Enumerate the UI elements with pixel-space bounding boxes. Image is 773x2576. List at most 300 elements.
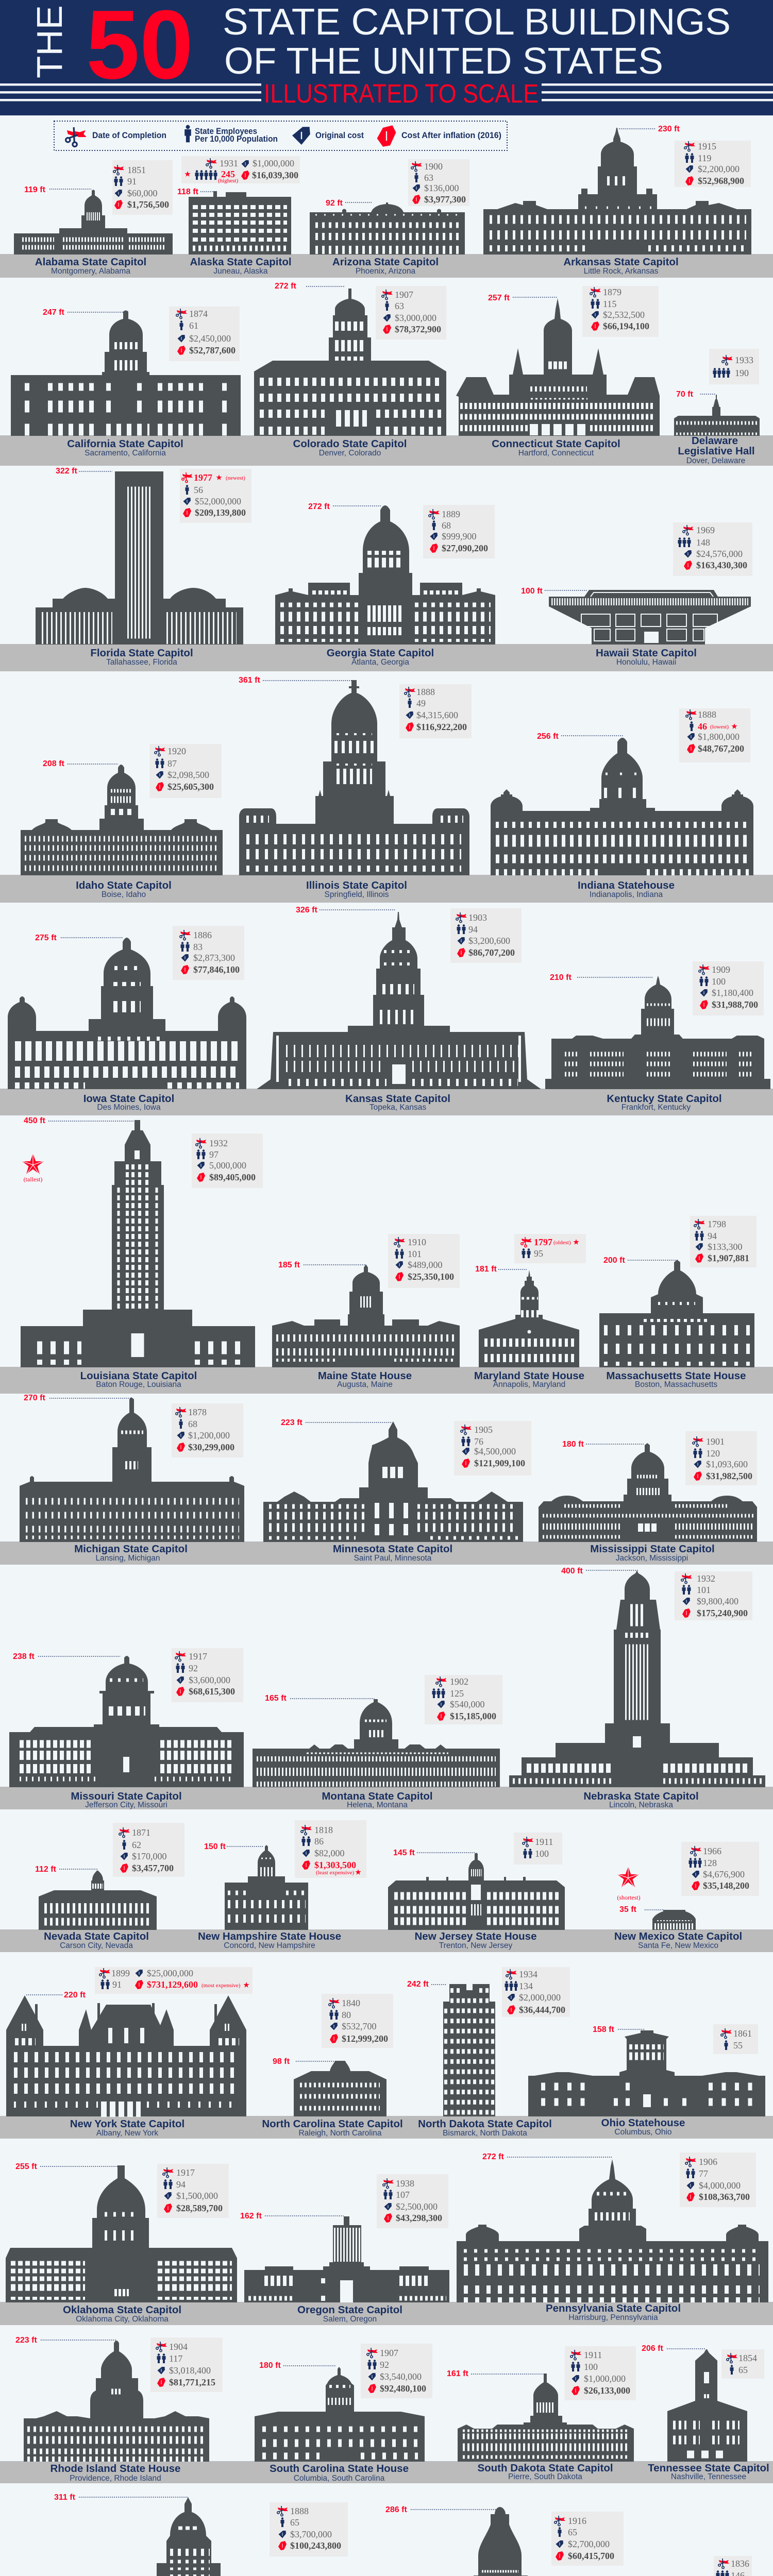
name (71, 1790, 182, 1809)
name: North Carolina State Capitol (262, 2118, 403, 2130)
stats panel: 1966 (703, 1846, 721, 1856)
stats panel: 1907 (380, 2348, 398, 2358)
stats panel: $52,968,900 (698, 176, 744, 186)
name: Salem, Oregon (323, 2315, 377, 2324)
height label: 98 ft (273, 2057, 290, 2066)
name: Delaware (692, 435, 738, 447)
stats panel: 1836 (731, 2558, 749, 2569)
name (418, 2118, 552, 2138)
stats panel: 65 (738, 2365, 748, 2375)
stats panel: $82,000 (314, 1848, 344, 1858)
stats panel: $209,139,800 (195, 507, 246, 518)
name: Boise, Idaho (102, 890, 146, 899)
panel: North Dakota State Capitol (407, 1967, 570, 2138)
name: Jefferson City, Missouri (85, 1801, 167, 1809)
stats panel (675, 141, 751, 187)
name (322, 1790, 433, 1809)
stats panel: (most expensive) (201, 1982, 241, 1989)
panel: Minnesota State Capitol (263, 1418, 531, 1563)
stats panel (112, 160, 173, 215)
height label: 150 ft (204, 1842, 226, 1851)
name (293, 438, 407, 457)
stats panel: 1931 (220, 158, 238, 168)
stats panel: 190 (735, 368, 749, 378)
stats panel: $1,180,400 (712, 988, 753, 998)
panel: Oregon State Capitol (240, 2174, 449, 2324)
name: Montana State Capitol (322, 1790, 433, 1802)
stats panel: 1906 (699, 2157, 717, 2167)
height label: 242 ft (407, 1980, 429, 1989)
building (491, 738, 753, 875)
stats panel: $28,589,700 (176, 2203, 223, 2213)
name: Atlanta, Georgia (351, 658, 409, 667)
stats panel: $52,000,000 (195, 496, 241, 506)
name (297, 2304, 402, 2324)
height label: 272 ft (275, 282, 296, 291)
panel: Nebraska State Capitol (509, 1567, 765, 1809)
name: Florida State Capitol (90, 647, 193, 659)
stats panel: 56 (194, 485, 203, 495)
stats panel: $25,350,100 (408, 1272, 454, 1282)
title line 1: STATE CAPITOL BUILDINGS (223, 2, 731, 43)
height label: 112 ft (35, 1865, 57, 1874)
building (388, 1853, 565, 1930)
building (667, 2349, 747, 2462)
name: Dover, Delaware (686, 456, 745, 465)
height label (593, 2025, 645, 2034)
panel: Missouri State Capitol (9, 1648, 244, 1809)
name (90, 647, 193, 667)
stats panel (565, 2346, 636, 2400)
stats panel (713, 2024, 758, 2054)
name (76, 879, 172, 899)
building (294, 2061, 386, 2116)
stats panel: 61 (189, 320, 198, 331)
name: Alabama State Capitol (35, 256, 146, 268)
name (262, 2118, 403, 2138)
name: Denver, Colorado (319, 449, 381, 457)
name: Massachusetts State House (606, 1370, 746, 1382)
building (456, 298, 660, 436)
name (492, 438, 620, 457)
name: Lincoln, Nebraska (609, 1801, 673, 1809)
name: North Dakota State Capitol (418, 2118, 552, 2130)
stats panel (551, 2512, 624, 2566)
stats panel: $4,500,000 (474, 1446, 516, 1456)
building (599, 1260, 754, 1367)
building (36, 471, 243, 645)
height label (676, 390, 715, 399)
name (563, 256, 679, 276)
name (414, 1930, 537, 1950)
stats panel: 63 (395, 301, 404, 311)
stats panel: 100 (712, 976, 726, 987)
name (44, 1930, 149, 1950)
stats panel: $1,907,881 (708, 1253, 749, 1263)
panel: Idaho State Capitol (21, 744, 223, 899)
building (257, 912, 541, 1089)
stats panel: 1871 (132, 1827, 150, 1838)
name: Ohio Statehouse (601, 2117, 685, 2129)
height label (24, 185, 91, 194)
name (333, 1543, 452, 1563)
stats panel: $60,000 (127, 188, 158, 198)
stats panel (388, 1234, 460, 1288)
stats panel: 62 (132, 1840, 141, 1850)
building (275, 505, 495, 645)
stats panel: 1977 (194, 472, 212, 483)
building (263, 1421, 523, 1542)
height label: 238 ft (13, 1652, 35, 1661)
stats panel (425, 1675, 502, 1724)
name (306, 879, 407, 899)
stats panel: (lowest) (710, 724, 729, 730)
stats panel: 1905 (474, 1425, 493, 1435)
stats panel: 1851 (127, 165, 146, 175)
stats panel: $78,372,900 (395, 324, 441, 334)
name (198, 1930, 341, 1950)
stats panel (675, 1571, 752, 1620)
stats panel: 120 (706, 1448, 720, 1459)
panel: Vermont State House (634, 2556, 753, 2576)
name: Lansing, Michigan (96, 1554, 160, 1563)
height label: 162 ft (240, 2212, 262, 2221)
name (80, 1370, 197, 1389)
panel: Montana State Capitol (253, 1675, 502, 1809)
panel: Utah State Capitol (376, 2505, 625, 2576)
name (590, 1543, 715, 1563)
name: Providence, Rhode Island (70, 2474, 161, 2483)
building (24, 2341, 209, 2462)
stats panel: $121,909,100 (474, 1458, 525, 1468)
name: Maryland State House (474, 1370, 584, 1382)
stats panel (150, 2337, 223, 2392)
legend icon: state employees (184, 125, 191, 142)
stats panel: $3,000,000 (395, 313, 436, 323)
name (35, 256, 146, 276)
stats panel: $1,500,000 (176, 2191, 218, 2201)
height label (326, 199, 372, 208)
height label: 206 ft (642, 2344, 663, 2353)
stats panel: 1888 (290, 2506, 309, 2516)
building (479, 1270, 579, 1367)
legend icon: cost after inflation (377, 125, 396, 147)
height label (642, 2344, 706, 2353)
name (74, 1543, 188, 1563)
building (253, 1699, 500, 1787)
panel: Indiana Statehouse (491, 708, 753, 899)
stats panel: 1902 (450, 1676, 468, 1687)
stats panel: 100 (535, 1849, 549, 1859)
stats panel: $48,767,200 (698, 743, 744, 754)
height label: 210 ft (550, 973, 572, 982)
panel: Iowa State Capitol (8, 926, 246, 1112)
name: Des Moines, Iowa (97, 1103, 161, 1112)
name: Augusta, Maine (337, 1380, 393, 1389)
name: Juneau, Alaska (213, 267, 268, 276)
stats panel (709, 349, 759, 384)
stats panel: $86,707,200 (468, 947, 515, 958)
stats panel (714, 2556, 752, 2576)
building (652, 1910, 696, 1930)
height label (475, 1265, 528, 1274)
caption: shortest: (shortest) (617, 1894, 641, 1901)
name: Minnesota State Capitol (333, 1543, 452, 1555)
name: Idaho State Capitol (76, 879, 172, 891)
stats panel: $116,922,200 (416, 722, 467, 732)
stats panel: $26,133,000 (584, 2385, 630, 2396)
name: Pierre, South Dakota (508, 2472, 582, 2481)
name: Helena, Montana (347, 1801, 408, 1809)
height label: 361 ft (239, 676, 260, 685)
name: Oklahoma City, Oklahoma (76, 2315, 169, 2324)
stats panel: $25,000,000 (147, 1968, 193, 1978)
stats panel: $27,090,200 (442, 543, 488, 553)
stats panel: $3,977,300 (424, 194, 466, 205)
legend label: employees: State Employees (195, 126, 257, 136)
stats panel: 1888 (698, 709, 716, 720)
stats panel (192, 1133, 263, 1188)
building (255, 2367, 425, 2462)
name (190, 256, 292, 276)
stats panel: 1917 (189, 1651, 207, 1662)
name (63, 2304, 181, 2324)
height label: 247 ft (43, 308, 64, 317)
building (21, 2497, 356, 2576)
stats panel (721, 2349, 764, 2379)
stats panel: $175,240,900 (697, 1608, 748, 1618)
name (474, 1370, 584, 1389)
stats panel: 119 (698, 153, 711, 163)
stats panel: 1798 (708, 1219, 726, 1229)
stats panel: $60,415,700 (568, 2551, 614, 2561)
name: Hartford, Connecticut (518, 449, 594, 457)
name: Legislative Hall (678, 445, 755, 457)
panel: Kentucky State Capitol (545, 961, 770, 1112)
height label: 223 ft (15, 2336, 37, 2345)
name: Columbia, South Carolina (294, 2474, 385, 2483)
stats panel: 1904 (169, 2342, 188, 2352)
stats panel: $163,430,300 (696, 560, 747, 570)
name: Nashville, Tennessee (671, 2472, 746, 2481)
name: Tallahassee, Florida (106, 658, 177, 667)
stats panel: 1901 (706, 1436, 725, 1447)
stats panel (181, 156, 300, 184)
name: Little Rock, Arkansas (584, 267, 659, 276)
stats panel: 1840 (342, 1998, 360, 2008)
height label: 200 ft (603, 1256, 625, 1265)
height label (275, 282, 345, 291)
name (546, 2302, 681, 2322)
stats panel: $136,000 (424, 183, 459, 193)
building (376, 2507, 625, 2576)
stats panel: 128 (703, 1858, 717, 1868)
stats panel: $68,615,300 (189, 1686, 235, 1697)
building (457, 2159, 768, 2302)
height label: 286 ft (385, 2505, 407, 2514)
building (225, 1845, 308, 1930)
stats panel (169, 307, 240, 361)
legend label: date: Date of Completion (92, 130, 166, 140)
stats panel (685, 1431, 757, 1485)
stats panel: 1933 (735, 355, 753, 365)
stats panel: 55 (733, 2040, 743, 2050)
panel: Colorado State Capitol (254, 282, 446, 457)
name (332, 256, 439, 276)
stats panel: 1886 (193, 930, 212, 940)
panel: Connecticut State Capitol (456, 286, 660, 457)
height label: 100 ft (521, 587, 543, 596)
legend label: original cost: Original cost (315, 130, 364, 140)
stats panel: $43,298,300 (396, 2213, 442, 2223)
panel: New Jersey State House (388, 1833, 565, 1950)
title line 2: OF THE UNITED STATES (224, 41, 663, 82)
height label: 161 ft (447, 2369, 468, 2378)
stats panel: 1818 (314, 1825, 333, 1835)
height label (619, 1905, 663, 1914)
stats panel: $9,800,400 (697, 1596, 738, 1606)
panel: Tennessee State Capitol (642, 2344, 769, 2481)
stats panel (322, 1994, 393, 2048)
stats panel: $52,787,600 (189, 345, 236, 355)
stats panel: $100,243,800 (290, 2540, 341, 2551)
stats panel (450, 908, 522, 963)
height label (56, 467, 112, 476)
stats panel: 94 (176, 2179, 186, 2190)
name: Montgomery, Alabama (51, 267, 130, 276)
name: Indiana Statehouse (578, 879, 675, 891)
name: Hawaii State Capitol (596, 647, 697, 659)
stats panel (502, 1967, 570, 2017)
panel: Alabama State Capitol (14, 160, 173, 276)
stats panel (173, 926, 244, 980)
stats panel: $3,200,600 (468, 936, 510, 946)
name: Louisiana State Capitol (80, 1370, 197, 1382)
stats panel: 1916 (568, 2516, 586, 2526)
height label (407, 1980, 446, 1989)
height label: 70 ft (676, 390, 694, 399)
stats panel: $35,148,200 (703, 1880, 749, 1891)
stats panel: (least expensive) (316, 1870, 355, 1876)
stats panel: 5,000,000 (209, 1160, 246, 1171)
panel: New York State Capitol (6, 1967, 253, 2138)
name: Honolulu, Hawaii (616, 658, 676, 667)
legend label: cost after inflation: Cost After inflation (2016) (401, 130, 501, 140)
stats panel (454, 1421, 531, 1476)
stats panel: 1861 (733, 2028, 752, 2039)
stats panel: $89,405,000 (209, 1172, 256, 1182)
panel: Texas State Capitol (21, 2493, 356, 2576)
stats panel: $1,000,000 (584, 2374, 626, 2384)
stats panel: 91 (112, 1979, 122, 1990)
name: New Hampshire State House (198, 1930, 341, 1942)
stats panel: $1,000,000 (253, 158, 294, 168)
stats panel: 1888 (416, 687, 435, 697)
stats panel: $2,200,000 (698, 164, 740, 174)
stats panel: $108,363,700 (699, 2192, 750, 2202)
panel: Arizona State Capitol (310, 159, 469, 276)
name: Oklahoma State Capitol (63, 2304, 181, 2316)
name: Annapolis, Maryland (493, 1380, 565, 1389)
name: Frankfort, Kentucky (621, 1103, 691, 1112)
name: Kentucky State Capitol (607, 1093, 722, 1105)
title word THE: THE (29, 5, 70, 78)
name (70, 2118, 184, 2138)
stats panel (270, 2502, 348, 2556)
building (509, 1570, 765, 1787)
stats panel: 76 (474, 1436, 483, 1447)
stats panel: 1911 (584, 2350, 602, 2360)
height label: 92 ft (326, 199, 343, 208)
name: Missouri State Capitol (71, 1790, 182, 1802)
stats panel: 68 (442, 520, 451, 531)
height label (26, 1991, 86, 1999)
building (545, 976, 770, 1089)
name (327, 647, 434, 667)
stats panel: $3,600,000 (189, 1675, 230, 1685)
height label: 185 ft (278, 1261, 300, 1269)
name: Indianapolis, Indiana (590, 890, 663, 899)
name: Alaska State Capitol (190, 256, 292, 268)
legend label: employees (195, 126, 278, 144)
panel: Georgia State Capitol (275, 502, 495, 667)
stats panel: 1915 (698, 141, 716, 151)
stats panel: 80 (342, 2010, 351, 2020)
stats panel (514, 1234, 586, 1263)
stats panel: 1797 (534, 1237, 552, 1247)
stats panel: $2,000,000 (519, 1992, 561, 2003)
stats panel (399, 684, 472, 738)
height label: 165 ft (265, 1694, 287, 1703)
name: Boston, Massachusetts (635, 1380, 717, 1389)
stats panel: 49 (416, 698, 426, 708)
stats panel: $999,900 (442, 531, 476, 541)
building (483, 128, 751, 255)
legend icon: date of completion (66, 127, 87, 146)
name: New Mexico State Capitol (614, 1930, 742, 1942)
height label (177, 188, 214, 196)
name: Concord, New Hampshire (224, 1941, 315, 1950)
stats panel: 92 (189, 1663, 198, 1673)
stats panel: $3,700,000 (290, 2529, 332, 2539)
panel: New Mexico State Capitol (614, 1842, 759, 1950)
stats panel: $31,982,500 (706, 1471, 752, 1481)
name (648, 2462, 769, 2481)
stats panel (295, 1820, 366, 1878)
name: Harrisburg, Pennsylvania (568, 2313, 658, 2322)
stats panel: 125 (450, 1688, 464, 1699)
stats panel (408, 159, 469, 206)
name (51, 2463, 180, 2483)
panel: Oklahoma State Capitol (6, 2162, 237, 2324)
name: Oregon State Capitol (297, 2304, 402, 2316)
building (239, 680, 469, 875)
star: tallest (22, 1154, 44, 1174)
name: Kansas State Capitol (345, 1093, 450, 1105)
stats panel: $3,457,700 (132, 1863, 174, 1873)
stats panel: $2,532,500 (603, 310, 645, 320)
stats panel: $3,540,000 (380, 2371, 422, 2382)
stats panel (377, 2174, 448, 2228)
legend (54, 121, 507, 150)
stats panel: 92 (380, 2360, 389, 2370)
stats panel: 1878 (188, 1407, 207, 1417)
stats panel: 83 (193, 942, 203, 952)
stats panel: $731,129,600 (147, 1979, 198, 1990)
building (189, 191, 291, 255)
height label: 322 ft (56, 467, 77, 476)
panel: Kansas State Capitol (257, 906, 541, 1112)
